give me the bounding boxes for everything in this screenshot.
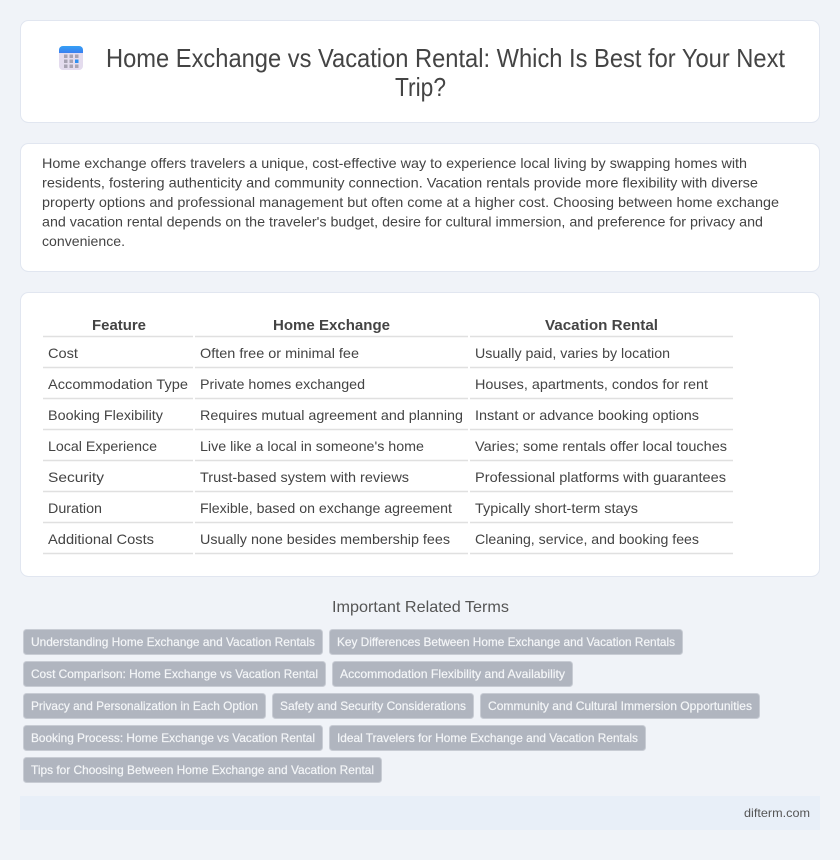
intro paragraph: convenience. (42, 233, 125, 249)
tag (330, 726, 646, 750)
row: booking flexibility: Instant or advance booking options (475, 407, 699, 423)
icon: calendar (59, 46, 83, 70)
row: cost: Often free or minimal fee (200, 345, 359, 361)
row: accommodation type (48, 376, 708, 392)
row: security: Security (48, 469, 104, 485)
tag: Understanding Home Exchange and Vacation Rentals (31, 635, 315, 649)
row: duration (48, 500, 638, 516)
row: additional costs: Cleaning, service, and booking fees (475, 531, 699, 547)
title text: Trip? (395, 72, 446, 102)
row: local experience (48, 438, 727, 454)
row: additional costs: Usually none besides membership fees (200, 531, 450, 547)
row: local experience: Live like a local in someone's home (200, 438, 424, 454)
row: cost: Usually paid, varies by location (475, 345, 670, 361)
tag (332, 662, 572, 686)
row: cost (48, 345, 670, 361)
tag: Tips for Choosing Between Home Exchange and Vacation Rental (31, 763, 374, 777)
row: duration: Typically short-term stays (475, 500, 638, 516)
intro paragraph: and vacation rental depends on the traveler's budget, desire for cultural immersion, and preference for privacy and (42, 214, 763, 230)
row: duration: Duration (48, 500, 102, 516)
tag (330, 630, 682, 654)
row: security (48, 469, 726, 485)
row: accommodation type: Private homes exchanged (200, 376, 365, 392)
table header: Feature (92, 318, 146, 334)
row: accommodation type: Accommodation Type (48, 376, 188, 392)
panel: introduction (20, 144, 820, 272)
tag: Booking Process: Home Exchange vs Vacation Rental (31, 731, 315, 745)
related terms tags (24, 630, 760, 782)
row: cost: Cost (48, 345, 78, 361)
heading: related terms: Important Related Terms (332, 599, 509, 616)
tag (24, 726, 322, 750)
row: duration: Flexible, based on exchange agreement (200, 500, 452, 516)
table header (92, 318, 658, 334)
panel: comparison table (20, 292, 820, 576)
row: security: Professional platforms with guarantees (475, 469, 726, 485)
tag: Community and Cultural Immersion Opportunities (488, 699, 752, 713)
tag: Key Differences Between Home Exchange and Vacation Rentals (337, 635, 675, 649)
row: booking flexibility: Requires mutual agreement and planning (200, 407, 463, 423)
row: local experience: Local Experience (48, 438, 157, 454)
row: additional costs: Additional Costs (48, 531, 154, 547)
footer (20, 796, 820, 830)
tag (24, 630, 322, 654)
tag: Cost Comparison: Home Exchange vs Vacation Rental (31, 667, 318, 681)
row: local experience: Varies; some rentals offer local touches (475, 438, 727, 454)
intro paragraph: residents, fostering authenticity and community connection. Vacation rentals provide more flexibility with diverse (42, 174, 758, 190)
title text: Home Exchange vs Vacation Rental: Which Is Best for Your Next (106, 43, 786, 73)
tag: Accommodation Flexibility and Availability (340, 667, 565, 681)
tag (24, 694, 266, 718)
tag: Ideal Travelers for Home Exchange and Vacation Rentals (337, 731, 638, 745)
tag (272, 694, 474, 718)
row: booking flexibility (48, 407, 699, 423)
intro paragraph: Home exchange offers travelers a unique, cost-effective way to experience local living by swapping homes with (42, 155, 747, 171)
panel: title (20, 20, 820, 122)
tag (24, 662, 326, 686)
footer: difterm.com (744, 806, 810, 820)
intro paragraph: property options and professional management but often come at a higher cost. Choosing between home exchange (42, 194, 779, 210)
tag (24, 758, 382, 782)
tag (480, 694, 760, 718)
table header: Vacation Rental (545, 318, 658, 334)
row: security: Trust-based system with reviews (200, 469, 409, 485)
tag: Safety and Security Considerations (280, 699, 466, 713)
row: booking flexibility: Booking Flexibility (48, 407, 163, 423)
tag: Privacy and Personalization in Each Option (31, 699, 258, 713)
row: additional costs (48, 531, 699, 547)
table header: Home Exchange (273, 318, 390, 334)
row: accommodation type: Houses, apartments, condos for rent (475, 376, 708, 392)
